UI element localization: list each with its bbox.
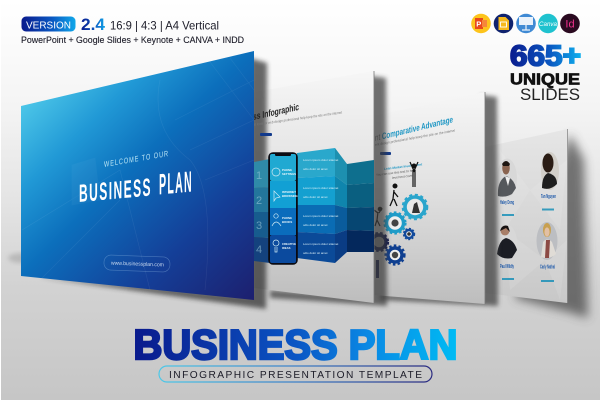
panel captions: Lorem ipsum dolor sitamet [303, 214, 339, 218]
folded text panels [297, 148, 374, 263]
phone labels: BROWSING [282, 194, 298, 198]
portrait: Paul Wildly [497, 225, 517, 259]
slide title: BUSINESS [79, 174, 152, 208]
format list: 16:9 | 4:3 | A4 Vertical [110, 18, 219, 32]
icon: PowerPoint: P [476, 20, 481, 28]
version badge: VERSION [26, 20, 71, 32]
heading: Comparative Advantage: nt Comparative Advantage [375, 114, 453, 143]
gear: bottom navy [386, 246, 404, 264]
portrait: Tan Nguyen [541, 152, 559, 190]
phone labels: PHONE [282, 216, 292, 220]
main title: BUSINESS PLAN [134, 321, 458, 368]
welcome line: WELCOME TO OUR [104, 149, 169, 169]
slide count [510, 40, 581, 104]
phone labels: IDEAS [282, 246, 291, 250]
slide title: PLAN [159, 164, 193, 201]
phone labels: INTERNET [282, 190, 296, 194]
figure: top, arms raised [410, 162, 418, 187]
UNIQUE: UNIQUE [510, 72, 580, 88]
gear: middle teal [384, 212, 406, 234]
slide 2: business infographic [38, 58, 387, 309]
gear chart [370, 162, 427, 278]
icon: Keynote [516, 14, 536, 33]
SLIDES: SLIDES [520, 86, 580, 104]
icon: Canva: Canva [539, 21, 557, 28]
left soft shadow [8, 253, 36, 263]
phone labels: PHONE [282, 168, 292, 172]
slide 2 shadow [270, 76, 387, 306]
panel captions: Lorem ipsum dolor sitamet [303, 186, 339, 190]
icon: InDesign: Id [565, 18, 575, 30]
team names: Paul Wildly [500, 264, 514, 270]
url pill: www.businessplan.com [110, 261, 165, 268]
arrows [380, 152, 391, 155]
slide 1 shadow [38, 58, 267, 309]
panel captions: odio dolor sit amet [303, 251, 328, 255]
phone labels: CREATIVE [282, 242, 296, 246]
panel captions: odio dolor sit amet [303, 167, 328, 171]
slide title [79, 164, 193, 208]
slide 4 shadow [515, 134, 588, 318]
slide 1: cover [8, 51, 254, 300]
phone icons [272, 168, 281, 252]
team names: Haley Dong [500, 200, 514, 206]
social dots [502, 208, 554, 282]
numbered strip [254, 159, 270, 263]
panel captions [303, 158, 339, 255]
software icons [471, 14, 580, 33]
slide 3 shadow [380, 95, 498, 306]
slide 2 page [254, 71, 374, 303]
slide 4 page [485, 129, 568, 303]
numbers 1-4: 4 [256, 244, 262, 256]
version number: 2.4 [81, 15, 106, 34]
phone labels [282, 168, 298, 250]
numbers 1-4 [256, 170, 262, 256]
caption block: level text cover [392, 173, 414, 180]
phone labels: SETTINGS [282, 172, 296, 176]
portrait: Haley Dong [497, 158, 517, 198]
numbers 1-4: 2 [256, 195, 262, 207]
caption block: Lean Market Involvement [384, 162, 423, 171]
subtitle pill: INFOGRAPHIC PRESENTATION TEMPLATE [169, 370, 422, 381]
team names [500, 194, 556, 270]
slide 1 panel [21, 51, 254, 300]
phone labels: BOOKS [282, 220, 292, 224]
heading: Business Infographic: ss Infographic [253, 102, 299, 123]
software list: PowerPoint + Google Slides + Keynote + CANVA + INDD [21, 35, 244, 45]
caption block [376, 162, 423, 180]
slide 3: comparative advantage [370, 92, 498, 306]
icon: Google Slides [494, 14, 513, 33]
team names: Carly Nathal [540, 264, 555, 270]
portrait: Carly Nathal [536, 222, 558, 260]
panel captions: odio dolor sit amet [303, 195, 328, 199]
figure: lower [374, 207, 382, 226]
phone [269, 153, 298, 264]
panel captions: odio dolor sit amet [303, 223, 328, 227]
url pill [104, 255, 170, 272]
figure: climbing [390, 184, 398, 206]
gear: lower dark partial [376, 260, 379, 278]
subtitle pill [159, 366, 432, 382]
gear: small navy [404, 229, 414, 239]
gear: dark partial [370, 233, 388, 251]
arrows [260, 133, 272, 136]
665+: 665+ [510, 40, 581, 72]
slide 3 page [374, 92, 485, 304]
faint triangle pattern [500, 150, 567, 300]
panel captions: Lorem ipsum dolor sitamet [303, 242, 339, 246]
panel captions: Lorem ipsum dolor sitamet [303, 158, 339, 162]
faint building lines [22, 58, 254, 290]
subheading: ult fonts for web design professional help keep the site on the internet [253, 111, 342, 127]
slide 4: team portraits [485, 129, 588, 318]
numbers 1-4: 3 [256, 220, 262, 232]
gear: top teal [403, 195, 427, 219]
numbers 1-4: 1 [256, 170, 262, 182]
subheading: ent design professional help keep the site on the internet [375, 129, 455, 147]
version badge [22, 16, 76, 32]
team names: Tan Nguyen [541, 194, 556, 200]
caption block: You can use this text to help [376, 168, 416, 177]
